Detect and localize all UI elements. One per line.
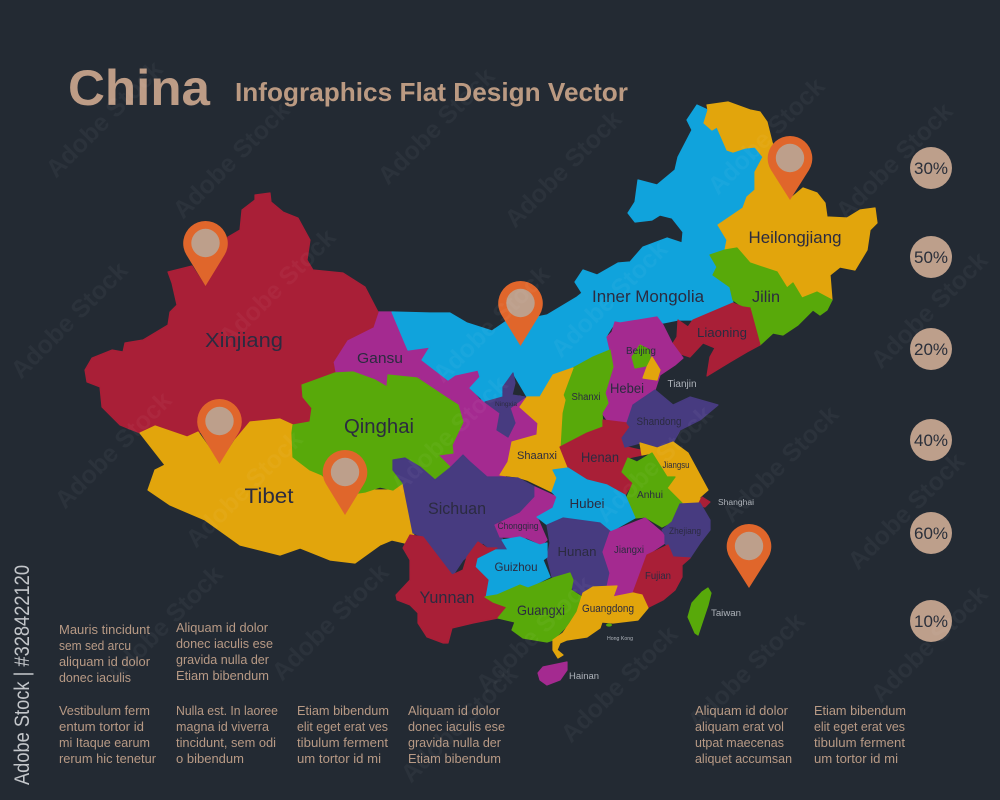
province: Jiangsu: [640, 442, 708, 503]
label: Jilin: Jilin: [752, 289, 780, 306]
province: Hubei: [537, 468, 635, 532]
watermarks: Adobe Stock: [372, 62, 500, 190]
province: Henan: [560, 420, 642, 495]
text block 5: tibulum ferment: [297, 735, 388, 750]
text block 4: Nulla est. In laoree: [176, 703, 278, 718]
label: Chongqing: Chongqing: [498, 521, 538, 531]
label: Hong Kong: Hong Kong: [607, 636, 633, 642]
text block 3: Vestibulum ferm: [59, 703, 150, 718]
watermarks: Adobe Stock: [682, 607, 810, 735]
text block 4: tincidunt, sem odi: [176, 735, 276, 750]
watermarks: Adobe Stock: [865, 580, 993, 708]
province: Zhejiang: [662, 503, 710, 558]
text block 1: donec iaculis: [59, 670, 131, 685]
province: Shanxi: [560, 350, 613, 447]
text block 1: Mauris tincidunt: [59, 622, 150, 637]
label: Yunnan: Yunnan: [420, 588, 474, 607]
watermarks: Adobe Stock: [702, 72, 830, 200]
watermarks: Adobe Stock: [100, 560, 228, 688]
label: Shaanxi: Shaanxi: [517, 450, 557, 462]
text block 8: um tortor id mi: [814, 751, 898, 766]
watermarks: Adobe Stock: [842, 447, 970, 575]
label: Zhejiang: Zhejiang: [669, 526, 701, 536]
watermarks: Adobe Stock: [427, 260, 555, 388]
label: Inner Mongolia: Inner Mongolia: [592, 287, 705, 306]
label: Hainan: Hainan: [569, 671, 599, 681]
text block 8: tibulum ferment: [814, 735, 905, 750]
province: Liaoning: [672, 303, 760, 376]
vertical stock credit: Adobe Stock | #328422120: [11, 565, 34, 785]
text block 3: rerum hic tenetur: [59, 751, 157, 766]
text block 7: Aliquam id dolor: [695, 703, 789, 718]
province: Inner Mongolia: [392, 105, 763, 402]
province: Yunnan: [396, 535, 507, 643]
province: Fujian: [633, 545, 690, 608]
province: Guangxi: [485, 573, 582, 642]
label: Shanxi: Shanxi: [572, 392, 600, 403]
province: Shanghai: [698, 497, 710, 507]
label: Shanghai: Shanghai: [718, 498, 754, 507]
watermarks: Adobe Stock: [395, 660, 523, 788]
label: Henan: Henan: [581, 449, 619, 465]
text block 4: magna id viverra: [176, 719, 270, 734]
badge 60%: 60%: [914, 524, 948, 543]
watermarks: Adobe Stock: [716, 400, 844, 528]
label: Qinghai: Qinghai: [344, 416, 414, 438]
label: Beijing: Beijing: [626, 346, 656, 357]
text block 1: aliquam id dolor: [59, 654, 151, 669]
island: Taiwan: [688, 588, 711, 635]
badge 40%: 40%: [914, 431, 948, 450]
text block 6: Etiam bibendum: [408, 751, 501, 766]
icon: pin Xinjiang: [183, 221, 228, 286]
text block 2: gravida nulla der: [176, 652, 270, 667]
icon: pin Inner Mongolia: [498, 281, 543, 346]
province: Heilongjiang: [704, 102, 877, 300]
badge 50%: 50%: [914, 248, 948, 267]
watermarks: Adobe Stock: [470, 570, 598, 698]
subtitle: Infographics Flat Design Vector: [235, 77, 628, 107]
text block 2: donec iaculis ese: [176, 636, 273, 651]
badge 30%: [910, 147, 952, 189]
label: Taiwan: Taiwan: [711, 608, 741, 618]
map pins: [183, 136, 812, 588]
text block 2: Aliquam id dolor: [176, 620, 269, 635]
text block 3: mi Itaque earum: [59, 735, 150, 750]
icon: pin Taiwan Sea: [727, 524, 771, 588]
watermarks: Adobe Stock: [5, 256, 133, 384]
province: Xinjiang: [85, 193, 378, 440]
province: Anhui: [622, 453, 682, 527]
province: Guizhou: [475, 537, 550, 597]
watermarks: Adobe Stock: [180, 425, 308, 553]
label: Anhui: Anhui: [637, 490, 663, 501]
text block 3: entum tortor id: [59, 719, 144, 734]
text block 4: o bibendum: [176, 751, 244, 766]
watermarks: Adobe Stock: [40, 55, 168, 183]
badge 30%: 30%: [914, 159, 948, 178]
label: Shandong: Shandong: [636, 416, 682, 428]
text block 7: aliquet accumsan: [695, 751, 792, 766]
text block 8: Etiam bibendum: [814, 703, 906, 718]
province: Jilin: [710, 248, 832, 345]
province labels: [205, 228, 842, 681]
watermarks: Adobe Stock: [385, 370, 513, 498]
label: Gansu: Gansu: [357, 350, 403, 367]
province: Qinghai: [292, 372, 463, 495]
province: Shandong: [622, 390, 718, 448]
label: Liaoning: Liaoning: [697, 325, 747, 340]
badge 50%: [910, 236, 952, 278]
text block 2: Etiam bibendum: [176, 668, 269, 683]
title: China: [68, 60, 211, 116]
badge 10%: 10%: [914, 612, 948, 631]
label: Sichuan: Sichuan: [428, 499, 486, 518]
text block 5: um tortor id mi: [297, 751, 381, 766]
province: Gansu: [333, 312, 538, 480]
label: Tibet: Tibet: [244, 485, 294, 508]
province: Guangdong: [553, 586, 648, 658]
province: Shaanxi: [500, 368, 573, 492]
text block 7: aliquam erat vol: [695, 719, 784, 734]
island: Hong Kong: [606, 623, 612, 627]
label: Ningxia: Ningxia: [495, 401, 517, 408]
watermarks: Adobe Stock: [830, 97, 958, 225]
province: Chongqing: [495, 487, 557, 545]
label: Hubei: Hubei: [570, 496, 605, 511]
label: Guangxi: Guangxi: [517, 602, 565, 618]
badge 20%: 20%: [914, 340, 948, 359]
badge 10%: [910, 600, 952, 642]
label: Hunan: Hunan: [558, 544, 596, 559]
island: Hainan: [538, 662, 567, 685]
text block 5: Etiam bibendum: [297, 703, 389, 718]
province: Hunan: [547, 518, 612, 596]
province: Tibet: [140, 419, 415, 563]
watermarks: Adobe Stock: [590, 400, 718, 528]
watermarks: Adobe Stock: [865, 246, 993, 374]
watermarks: Adobe Stock: [213, 223, 341, 351]
label: Guangdong: Guangdong: [582, 603, 634, 615]
watermarks: Adobe Stock: [545, 235, 673, 363]
watermarks: Adobe Stock: [167, 96, 295, 224]
watermarks: Adobe Stock: [499, 105, 627, 233]
province: Beijing: [632, 345, 650, 368]
label: Fujian: Fujian: [645, 571, 671, 582]
label: Xinjiang: Xinjiang: [205, 330, 283, 352]
label: Tianjin: Tianjin: [668, 379, 696, 390]
badge 40%: [910, 419, 952, 461]
watermarks: Adobe Stock: [49, 386, 177, 514]
label: Guizhou: Guizhou: [494, 560, 538, 574]
text block 6: gravida nulla der: [408, 735, 502, 750]
icon: pin Qinghai: [323, 450, 367, 515]
text block 6: donec iaculis ese: [408, 719, 505, 734]
province: Sichuan: [393, 455, 535, 575]
province: Jiangxi: [603, 518, 665, 597]
percentage badges: [910, 147, 952, 642]
text block 6: Aliquam id dolor: [408, 703, 501, 718]
map of China provinces: [85, 102, 877, 685]
text block 8: elit eget erat ves: [814, 719, 905, 734]
text block 1: sem sed arcu: [59, 638, 131, 653]
badge 60%: [910, 512, 952, 554]
icon: pin Tibet: [197, 399, 242, 464]
province: Hebei: [602, 317, 683, 423]
label: Jiangsu: Jiangsu: [662, 460, 690, 470]
label: Jiangxi: Jiangxi: [614, 545, 644, 556]
label: Hebei: Hebei: [610, 380, 644, 396]
province: Tianjin: [643, 357, 660, 380]
icon: pin Heilongjiang: [768, 136, 812, 200]
text block 5: elit eget erat ves: [297, 719, 388, 734]
watermarks: Adobe Stock: [266, 558, 394, 686]
label: Heilongjiang: Heilongjiang: [748, 228, 842, 247]
text block 7: utpat maecenas: [695, 735, 784, 750]
province: Ningxia: [485, 373, 525, 437]
badge 20%: [910, 328, 952, 370]
watermarks: Adobe Stock: [555, 620, 683, 748]
